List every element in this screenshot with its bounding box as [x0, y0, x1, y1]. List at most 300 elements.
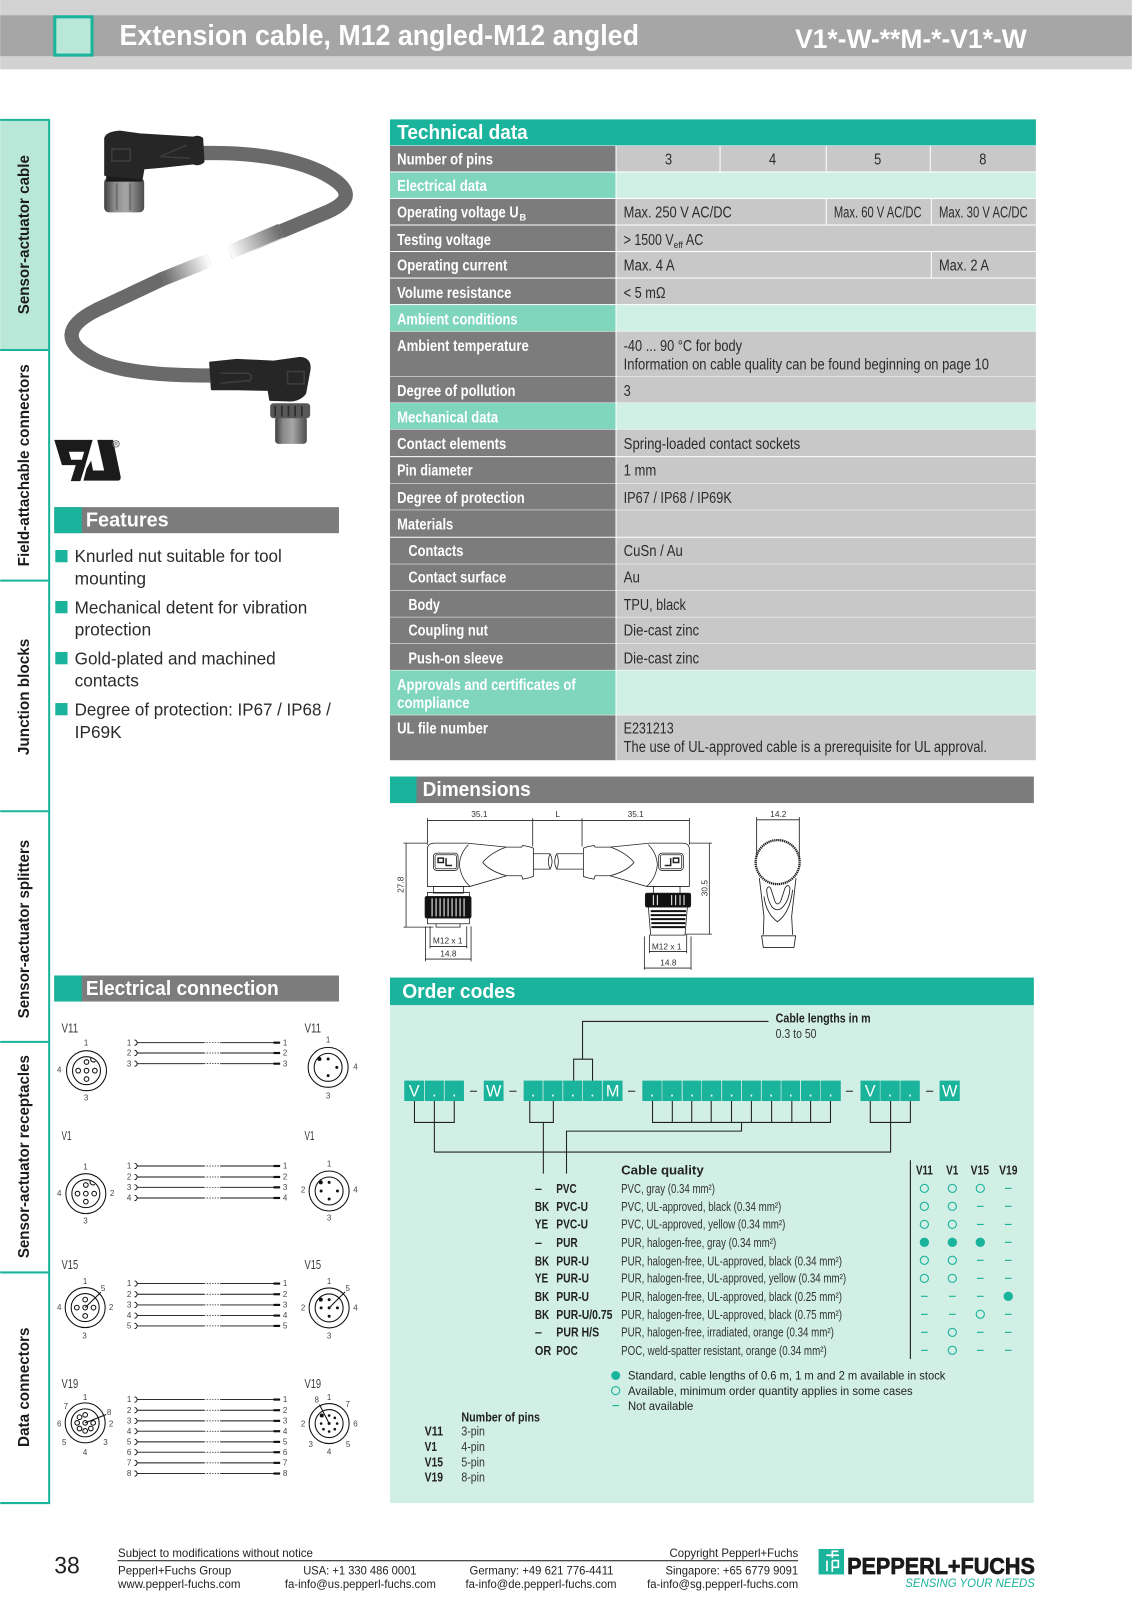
wiring: V11: 1 — [84, 1038, 89, 1047]
tab: Field-attachable connectors: Field-attachable connectors — [16, 364, 33, 566]
row: OR POC — [535, 1343, 827, 1358]
wiring: V1: 4 — [283, 1194, 288, 1203]
row: BK PVC-U — [535, 1199, 781, 1214]
row: PVC — [535, 1181, 715, 1196]
wiring: V11: 1 — [127, 1038, 132, 1047]
row: YE PUR-U — [535, 1271, 846, 1286]
wiring: V19: 2 — [109, 1420, 114, 1429]
heading: electrical connection: Electrical connection — [86, 978, 279, 1000]
number of pins list: 8-pin — [461, 1470, 485, 1485]
wiring: V19: 8 — [107, 1408, 112, 1417]
row: operating current: Operating current — [397, 257, 507, 274]
row: pin diameter — [390, 457, 1036, 483]
logo: Pepperl+Fuchs: SENSING YOUR NEEDS — [905, 1577, 1035, 1590]
wiring: V15: V15 — [62, 1258, 78, 1272]
row: number of pins — [390, 146, 1036, 171]
row: BK PUR-U black 0.34: PUR, halogen-free, UL-approved, black (0.34 mm²) — [621, 1253, 842, 1268]
legend: Standard, cable lengths of 0.6 m, 1 m and 2 m available in stock — [628, 1369, 946, 1383]
row: contact surface: Au — [624, 570, 640, 587]
footer rule and notices: Copyright Pepperl+Fuchs — [670, 1546, 798, 1560]
wiring: V1: 3 — [127, 1183, 132, 1192]
legend: Not available — [628, 1399, 694, 1413]
panel: technical data — [390, 119, 1036, 760]
row: body — [390, 591, 1036, 617]
wiring: V1: 4 — [353, 1186, 358, 1195]
row: PUR H/S: PUR, halogen-free, irradiated, orange (0.34 mm²) — [621, 1325, 834, 1340]
wiring: V19: 7 — [127, 1459, 132, 1468]
wiring: V15: 1 — [127, 1279, 132, 1288]
row: body: Body — [408, 597, 440, 614]
left connector — [425, 843, 552, 927]
number of pins list: 5-pin — [461, 1454, 485, 1469]
wiring: V19: 2 — [127, 1406, 132, 1415]
drawing: connector end view: 14.2 — [770, 809, 787, 819]
row: operating voltage: Max. 60 V AC/DC — [834, 204, 922, 221]
row: testing voltage — [390, 226, 1036, 251]
contact: USA: USA: +1 330 486 0001 — [303, 1563, 417, 1577]
wiring: V11: V11 — [62, 1022, 78, 1036]
cable lengths: Cable lengths in m — [776, 1010, 871, 1025]
row: PUR H/S: – — [535, 1325, 542, 1340]
row: degree of protection — [390, 484, 1036, 510]
row: coupling nut: Coupling nut — [408, 623, 488, 640]
row: operating current: Max. 4 A — [624, 257, 675, 274]
wiring: V15: 3 — [327, 1332, 332, 1341]
wiring: V1: 4 — [127, 1194, 132, 1203]
row: YE PVC-U: PVC, UL-approved, yellow (0.34 mm²) — [621, 1217, 785, 1232]
row: ambient conditions: Ambient conditions — [397, 311, 518, 328]
heading: technical data: Technical data — [397, 122, 529, 144]
row: YE PVC-U — [535, 1217, 785, 1232]
row: PUR H/S — [535, 1325, 834, 1340]
heading: technical data — [390, 119, 1036, 145]
logo: Pepperl+Fuchs — [819, 1549, 1035, 1590]
row: YE PUR-U: PUR-U — [556, 1271, 589, 1286]
row: PUR: – — [535, 1235, 542, 1250]
wiring: V19: V19 — [62, 1377, 78, 1391]
wiring diagrams V11 and V1 — [57, 1022, 358, 1225]
row: coupling nut: Die-cast zinc — [624, 623, 699, 640]
wiring: V11 — [57, 1022, 358, 1103]
heading: order codes: Order codes — [402, 981, 515, 1003]
row: PVC: PVC, gray (0.34 mm²) — [621, 1181, 715, 1196]
tab: Junction blocks: Junction blocks — [16, 639, 33, 755]
wiring: V11: V11 — [304, 1022, 321, 1036]
order code letters: W — [942, 1082, 958, 1100]
number of pins list: 3-pin — [461, 1424, 485, 1439]
wiring: V11: 3 — [283, 1059, 288, 1068]
part number: V1*-W-**M-*-V1*-W — [795, 24, 1027, 54]
row: approvals and certificates: Approvals and certificates of — [397, 677, 576, 694]
order code letters: . — [531, 1082, 535, 1100]
drawing: connectors side view: M12 x 1 — [652, 942, 682, 952]
row: degree of pollution: 3 — [624, 383, 631, 400]
wiring: V19: 2 — [301, 1420, 306, 1429]
number of pins list: V1 — [425, 1439, 437, 1454]
row: operating voltage — [390, 199, 1036, 224]
order code letters: . — [690, 1082, 694, 1100]
row: BK PVC-U: BK — [535, 1199, 550, 1214]
heading: dimensions: Dimensions — [423, 779, 531, 801]
row: number of pins: 8 — [979, 151, 986, 168]
wiring: V15: 4 — [283, 1311, 288, 1320]
wiring: V19 — [57, 1377, 358, 1478]
tab: Data connectors: Data connectors — [16, 1328, 33, 1447]
wiring: V19: 4 — [327, 1448, 332, 1457]
feature: knurled nut: Knurled nut suitable for tool — [75, 546, 282, 566]
order code separators — [470, 1090, 933, 1092]
wiring: V11: 2 — [127, 1049, 132, 1058]
wiring: V15: V15 — [304, 1258, 321, 1272]
wiring: V19: 5 — [283, 1438, 288, 1447]
wiring: V1: 3 — [327, 1213, 332, 1222]
row: operating voltage: Operating voltage U — [397, 204, 519, 221]
order code letters — [409, 1082, 958, 1100]
row: BK PUR-U black 0.25: PUR, halogen-free, UL-approved, black (0.25 mm²) — [621, 1289, 842, 1304]
row: electrical data: Electrical data — [397, 178, 487, 195]
number of pins list: 4-pin — [461, 1439, 485, 1454]
wiring: V15: 1 — [283, 1279, 288, 1288]
order code letters: . — [551, 1082, 555, 1100]
row: ambient temperature: Ambient temperature — [397, 338, 529, 355]
row: contact elements: Spring-loaded contact sockets — [624, 436, 800, 453]
order code letters: W — [486, 1082, 502, 1100]
product photo: cable with angled connectors — [72, 132, 346, 444]
row: body: TPU, black — [624, 597, 686, 614]
feature: gold-plated contacts — [55, 648, 276, 691]
row: YE PUR-U: YE — [535, 1271, 548, 1286]
heading: electrical connection — [54, 976, 339, 1002]
row: BK PUR-U/0.75: PUR, halogen-free, UL-approved, black (0.75 mm²) — [621, 1307, 842, 1322]
wiring: V15: 2 — [109, 1303, 114, 1312]
wiring: V19: 6 — [127, 1448, 132, 1457]
row: BK PVC-U: PVC-U — [556, 1199, 588, 1214]
row: volume resistance — [390, 279, 1036, 304]
row: BK PUR-U black 0.25 — [535, 1289, 842, 1304]
wiring: V11: 3 — [127, 1059, 132, 1068]
order code letters: . — [590, 1082, 595, 1100]
row: pin diameter: Pin diameter — [397, 463, 473, 480]
heading: features: Features — [86, 510, 169, 532]
wiring: V19: 4 — [127, 1427, 132, 1436]
row: YE PVC-U: YE — [535, 1217, 548, 1232]
heading: order codes — [390, 978, 1034, 1005]
order code letters: . — [789, 1082, 793, 1100]
feature: knurled nut — [55, 546, 282, 589]
number of pins list: Number of pins — [461, 1409, 540, 1424]
order code letters: . — [908, 1082, 912, 1100]
wiring: V15: 4 — [57, 1303, 62, 1312]
wiring: V15: 5 — [283, 1322, 288, 1331]
contact: Germany: Germany: +49 621 776-4411 — [470, 1563, 614, 1577]
drawing: connectors side view: 14.8 — [660, 957, 677, 967]
panel: electrical connection — [54, 976, 358, 1478]
row: UL file number: UL file number — [397, 721, 488, 738]
row: mechanical data — [390, 403, 1036, 429]
cable quality table — [535, 1160, 1018, 1359]
wiring: V19: 6 — [283, 1448, 288, 1457]
row: contact elements: Contact elements — [397, 436, 506, 453]
wiring: V15: 1 — [83, 1277, 88, 1286]
row: BK PUR-U black 0.34: PUR-U — [556, 1253, 589, 1268]
wiring: V15: 5 — [101, 1284, 106, 1293]
wiring: V19: 8 — [315, 1396, 320, 1405]
row: UL file number: E231213 — [624, 721, 674, 738]
row: OR POC: POC, weld-spatter resistant, orange (0.34 mm²) — [621, 1343, 827, 1358]
logo: Pepperl+Fuchs: PEPPERL+FUCHS — [847, 1553, 1035, 1579]
feature: degree of protection: IP69K — [75, 722, 122, 742]
feature: degree of protection — [55, 699, 331, 742]
wiring: V15: 1 — [327, 1277, 332, 1286]
footer rule and notices — [118, 1546, 798, 1561]
footer — [54, 1546, 1035, 1591]
wiring: V11: 3 — [326, 1091, 331, 1100]
feature: gold-plated contacts: contacts — [75, 671, 139, 691]
wiring: V15: 2 — [127, 1290, 132, 1299]
row: BK PUR-U/0.75: PUR-U/0.75 — [556, 1307, 612, 1322]
row: contacts: Contacts — [408, 543, 463, 560]
wiring: V11: 4 — [353, 1063, 358, 1072]
wiring: V19: 3 — [283, 1417, 288, 1426]
row: ambient conditions — [390, 305, 1036, 331]
row: operating voltage: B — [520, 212, 527, 222]
order code letters: . — [452, 1082, 457, 1100]
row: electrical data — [390, 172, 1036, 198]
wiring: V19: 8 — [283, 1469, 288, 1478]
wiring: V19: 7 — [64, 1402, 69, 1411]
feature: gold-plated contacts: Gold-plated and machined — [75, 648, 276, 668]
row: number of pins: Number of pins — [397, 151, 493, 168]
contact: Germany — [465, 1563, 617, 1591]
row: ambient temperature — [390, 332, 1036, 376]
order code letters: . — [729, 1082, 734, 1100]
row: volume resistance: < 5 mΩ — [624, 285, 665, 302]
legend: Available, minimum order quantity applies in some cases — [628, 1384, 913, 1398]
drawing: connectors side view: 35.1 — [471, 809, 488, 819]
wiring: V11: 2 — [283, 1049, 288, 1058]
row: BK PUR-U/0.75: BK — [535, 1307, 550, 1322]
order code letters: . — [670, 1082, 674, 1100]
wiring: V11: 3 — [84, 1094, 89, 1103]
wiring: V11: 4 — [57, 1066, 62, 1075]
wiring: V19: 4 — [83, 1448, 88, 1457]
wiring: V1: 1 — [327, 1159, 332, 1168]
panel: features — [54, 507, 339, 742]
wiring: V1: V1 — [62, 1129, 72, 1143]
wiring: V19: 5 — [62, 1438, 67, 1447]
order code letters: . — [888, 1082, 892, 1100]
drawing: connectors side view: M12 x 1 — [433, 935, 463, 945]
row: BK PUR-U black 0.34 — [535, 1253, 842, 1268]
heading: features — [54, 507, 339, 533]
row: BK PUR-U black 0.25: BK — [535, 1289, 550, 1304]
row: push-on sleeve: Die-cast zinc — [624, 650, 699, 667]
row: contacts: CuSn / Au — [624, 543, 683, 560]
wiring: V15: 2 — [283, 1290, 288, 1299]
wiring: V19: 7 — [283, 1459, 288, 1468]
legend — [611, 1369, 946, 1413]
row: operating voltage: Max. 250 V AC/DC — [624, 204, 732, 221]
cable quality table: V19 — [999, 1162, 1018, 1177]
order code letters: . — [570, 1082, 575, 1100]
wiring: V19: 5 — [346, 1440, 351, 1449]
contact: Singapore: fa-info@sg.pepperl-fuchs.com — [647, 1577, 798, 1591]
wiring: V15 — [57, 1258, 358, 1341]
order code letters: . — [749, 1082, 754, 1100]
drawing: connectors side view: 35.1 — [628, 809, 644, 819]
row: number of pins: 4 — [769, 151, 777, 168]
order code letters: . — [650, 1082, 654, 1100]
wiring diagrams V15 and V19 — [57, 1258, 358, 1478]
number of pins list: V11 — [425, 1424, 443, 1439]
wiring: V15: 3 — [283, 1301, 288, 1310]
order code letters: V — [409, 1082, 420, 1100]
wiring: V15: 4 — [353, 1304, 358, 1313]
row: operating current: Max. 2 A — [939, 257, 990, 274]
row: operating voltage: Max. 30 V AC/DC — [939, 204, 1028, 221]
row: PVC: PVC — [556, 1181, 577, 1196]
title: Extension cable, M12 angled-M12 angled — [120, 20, 639, 52]
feature: mechanical detent: Mechanical detent for vibration — [75, 597, 307, 617]
contact: Germany: fa-info@de.pepperl-fuchs.com — [465, 1577, 617, 1591]
wiring: V19: 6 — [353, 1420, 358, 1429]
row: PUR: PUR — [556, 1235, 578, 1250]
row: materials — [390, 510, 1036, 537]
feature: mechanical detent — [55, 597, 307, 640]
side navigation tabs — [0, 119, 50, 1504]
row: YE PUR-U: PUR, halogen-free, UL-approved, yellow (0.34 mm²) — [621, 1271, 846, 1286]
panel: order codes — [390, 978, 1034, 1503]
row: materials: Materials — [397, 517, 453, 534]
row: pin diameter: 1 mm — [624, 463, 656, 480]
cable lengths: 0.3 to 50 — [776, 1026, 817, 1041]
wiring: V15: 4 — [127, 1311, 132, 1320]
row: push-on sleeve: Push-on sleeve — [408, 650, 503, 667]
order code letters: . — [769, 1082, 773, 1100]
drawing: connectors side view: 27.8 — [395, 876, 405, 893]
wiring: V11: 1 — [326, 1035, 331, 1044]
wiring: V19: 1 — [283, 1395, 288, 1404]
number of pins list: V15 — [425, 1454, 443, 1469]
wiring: V11: 1 — [283, 1038, 288, 1047]
feature: degree of protection: Degree of protection: IP67 / IP68 / — [75, 699, 331, 719]
drawing: connectors side view: 30.5 — [699, 880, 709, 896]
icon: UL recognized mark — [54, 440, 121, 481]
row: YE PVC-U: PVC-U — [556, 1217, 588, 1232]
contact: group: www.pepperl-fuchs.com — [117, 1577, 240, 1591]
wiring: V1: 2 — [127, 1173, 132, 1182]
drawing: connectors side view: 14.8 — [440, 948, 457, 958]
wiring: V19: 7 — [346, 1400, 351, 1409]
bottom connector — [210, 358, 310, 444]
order code letters: . — [709, 1082, 714, 1100]
number of pins list: V19 — [425, 1470, 443, 1485]
footer rule and notices: Subject to modifications without notice — [118, 1546, 313, 1560]
header band — [0, 0, 1132, 69]
wiring: V19: 1 — [83, 1393, 88, 1402]
row: PUR H/S: PUR H/S — [556, 1325, 599, 1340]
contact: Singapore — [647, 1563, 798, 1591]
wiring: V1: 4 — [57, 1189, 62, 1198]
wiring: V1: 1 — [127, 1162, 132, 1171]
row: BK PUR-U black 0.34: BK — [535, 1253, 550, 1268]
row: BK PVC-U: PVC, UL-approved, black (0.34 mm²) — [621, 1199, 781, 1214]
page number: 38 — [54, 1552, 80, 1579]
wiring: V19: 2 — [283, 1406, 288, 1415]
row: PVC: – — [535, 1181, 542, 1196]
wiring: V19: 3 — [309, 1440, 314, 1449]
wiring: V19: 1 — [127, 1395, 132, 1404]
row: approvals and certificates — [390, 670, 1036, 715]
drawing: connector end view — [756, 809, 800, 947]
row: contacts — [390, 538, 1036, 564]
icon: registered mark — [113, 441, 119, 447]
row: operating current — [390, 252, 1036, 278]
tab: Sensor-actuator receptacles: Sensor-actuator receptacles — [16, 1055, 33, 1258]
row: coupling nut — [390, 617, 1036, 643]
row: contact surface: Contact surface — [408, 570, 506, 587]
contact: USA — [285, 1563, 436, 1591]
cable quality table: V1 — [946, 1162, 958, 1177]
wiring: V19: V19 — [304, 1377, 321, 1391]
order code letters: . — [432, 1082, 437, 1100]
row: testing voltage: eff — [674, 240, 683, 250]
order code letters: M — [606, 1082, 619, 1100]
row: PUR — [535, 1235, 776, 1250]
cable quality table: V15 — [971, 1162, 989, 1177]
row: testing voltage: AC — [686, 232, 703, 249]
row: degree of protection: IP67 / IP68 / IP69K — [624, 490, 732, 507]
wiring: V19: 1 — [327, 1393, 332, 1402]
row: BK PUR-U black 0.25: PUR-U — [556, 1289, 589, 1304]
order code connector lines — [414, 1021, 910, 1174]
order code letters: V — [865, 1082, 876, 1100]
contact: group — [117, 1563, 240, 1591]
row: degree of pollution: Degree of pollution — [397, 383, 515, 400]
wiring: V19: 3 — [127, 1417, 132, 1426]
icon: header colour square — [55, 17, 92, 55]
wiring: V1: 3 — [83, 1216, 88, 1225]
row: UL file number: The use of UL-approved cable is a prerequisite for UL approval. — [624, 739, 987, 756]
heading: dimensions — [390, 777, 1034, 803]
wiring: V19: 3 — [103, 1438, 108, 1447]
row: approvals and certificates: compliance — [397, 695, 470, 712]
cable quality table: V11 — [916, 1162, 933, 1177]
number of pins list — [425, 1409, 540, 1485]
wiring: V15: 5 — [346, 1284, 351, 1293]
right connector — [555, 843, 691, 935]
order code boxes — [404, 1081, 960, 1101]
drawing: connectors side view — [395, 809, 712, 970]
row: number of pins: 5 — [874, 151, 881, 168]
order code letters: . — [808, 1082, 813, 1100]
row: PUR: PUR, halogen-free, gray (0.34 mm²) — [621, 1235, 776, 1250]
availability symbols — [920, 1184, 1013, 1354]
row: push-on sleeve — [390, 644, 1036, 670]
dimension lines — [403, 818, 712, 970]
wiring: V15: 3 — [82, 1332, 87, 1341]
row: testing voltage: Testing voltage — [397, 232, 491, 249]
cable lengths — [776, 1010, 871, 1041]
contact: USA: fa-info@us.pepperl-fuchs.com — [285, 1577, 436, 1591]
wiring: V1 — [57, 1129, 358, 1225]
row: ambient temperature: -40 ... 90 °C for body — [624, 338, 742, 355]
row: BK PUR-U/0.75 — [535, 1307, 842, 1322]
contact: group: Pepperl+Fuchs Group — [118, 1563, 231, 1577]
wiring: V19: 4 — [283, 1427, 288, 1436]
wiring: V19: 8 — [127, 1469, 132, 1478]
feature: mechanical detent: protection — [75, 620, 151, 640]
